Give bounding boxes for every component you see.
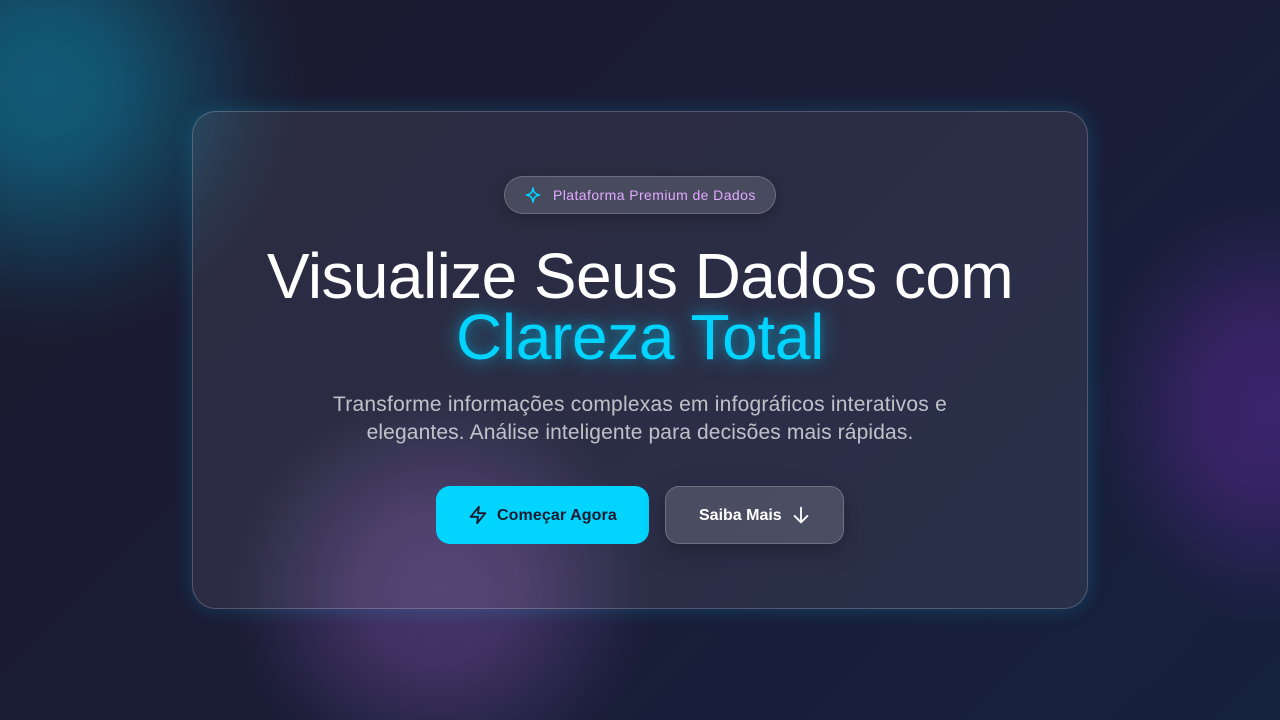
title highlight: Clareza Total — [456, 301, 824, 373]
icon: sparkle — [526, 187, 540, 203]
button label: Saiba Mais — [699, 507, 782, 524]
icon: lightning — [470, 506, 486, 524]
subtitle — [333, 393, 947, 444]
button label: Começar Agora — [497, 507, 617, 524]
badge — [504, 176, 776, 214]
button: primary — [436, 486, 649, 544]
panel: hero card — [192, 111, 1088, 609]
title: Visualize Seus Dados com — [267, 240, 1013, 312]
title — [267, 240, 1013, 373]
badge text: Plataforma Premium de Dados — [553, 187, 756, 203]
subtitle: elegantes. Análise inteligente para decisões mais rápidas. — [367, 421, 913, 444]
subtitle: Transforme informações complexas em infográficos interativos e — [333, 393, 947, 416]
button: secondary — [665, 486, 844, 544]
icon: arrow down — [794, 506, 808, 524]
